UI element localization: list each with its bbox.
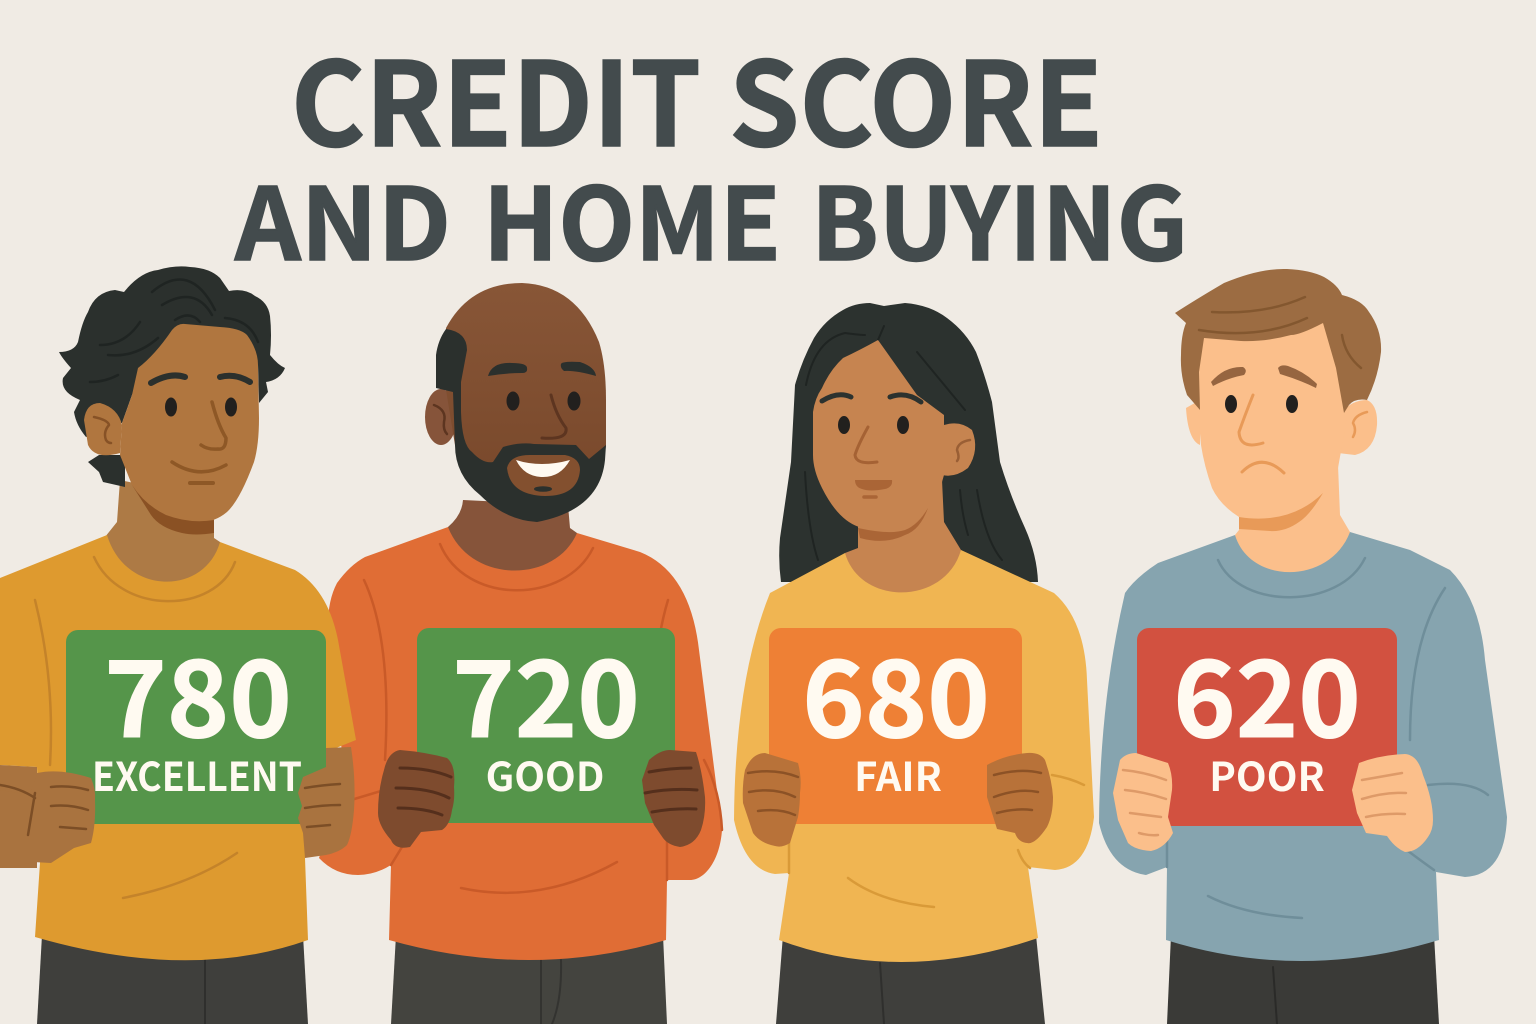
pants (391, 935, 667, 1024)
chin shadow (1239, 493, 1323, 531)
eyes and brows (165, 398, 177, 416)
chin shadow (858, 508, 928, 541)
sign 720: 720 (452, 614, 640, 768)
neck (1235, 465, 1350, 615)
shirt (0, 535, 356, 960)
sign 680 (769, 614, 1022, 824)
nose and frown (1239, 395, 1284, 473)
hair (59, 266, 285, 437)
pants (37, 935, 308, 1024)
hair (1175, 269, 1381, 413)
eyes and brows (838, 416, 850, 434)
left hand (0, 771, 95, 868)
right hand (1352, 754, 1433, 852)
title (234, 12, 1188, 289)
title: AND (234, 144, 451, 289)
title: CREDIT (291, 12, 701, 180)
hair strands (90, 280, 258, 382)
sign 680: FAIR (854, 745, 942, 803)
face (120, 324, 259, 522)
right hand (642, 750, 705, 847)
head (446, 283, 606, 522)
sign 720 (417, 614, 675, 823)
lower hair (88, 455, 125, 487)
neck (845, 480, 961, 625)
left arm (0, 765, 37, 868)
person: excellent 780 (0, 266, 356, 1024)
left hand (1113, 753, 1173, 851)
right hand (298, 747, 355, 858)
ear (942, 423, 975, 476)
jaw shadow (132, 485, 214, 534)
sign 620: 620 (1173, 614, 1361, 768)
sign 780: EXCELLENT (92, 745, 302, 803)
pants (776, 935, 1045, 1024)
sign 680: 680 (802, 614, 990, 768)
shirt (319, 527, 722, 960)
eyes and brows (1225, 395, 1237, 413)
face (1195, 315, 1348, 518)
sign 720: GOOD (486, 745, 604, 803)
mouth area (507, 455, 580, 496)
person: good 720 (319, 283, 722, 1024)
left hand (378, 750, 454, 848)
title: HOME (483, 144, 781, 289)
left hand (743, 753, 801, 847)
smile (516, 460, 570, 477)
pants (1167, 935, 1439, 1024)
title: BUYING (811, 144, 1188, 289)
nose and mouth (172, 402, 226, 472)
person: poor 620 (1099, 269, 1507, 1024)
person: fair 680 (734, 303, 1094, 1024)
sign 620: POOR (1209, 745, 1325, 803)
ear (425, 389, 457, 445)
title: SCORE (729, 12, 1103, 180)
face (813, 340, 944, 531)
sign 780 (66, 614, 326, 824)
shirt (1099, 532, 1507, 961)
back hair (779, 303, 1038, 582)
side hair and beard (436, 329, 606, 522)
nose and mouth (855, 427, 877, 463)
shirt (734, 550, 1094, 962)
ears (1186, 400, 1377, 455)
ear (84, 403, 122, 455)
right hand (987, 753, 1053, 843)
neck (445, 500, 580, 600)
sign 780: 780 (104, 614, 292, 768)
sign 620 (1137, 614, 1397, 826)
neck (105, 480, 222, 610)
eyes and brows (506, 392, 520, 410)
